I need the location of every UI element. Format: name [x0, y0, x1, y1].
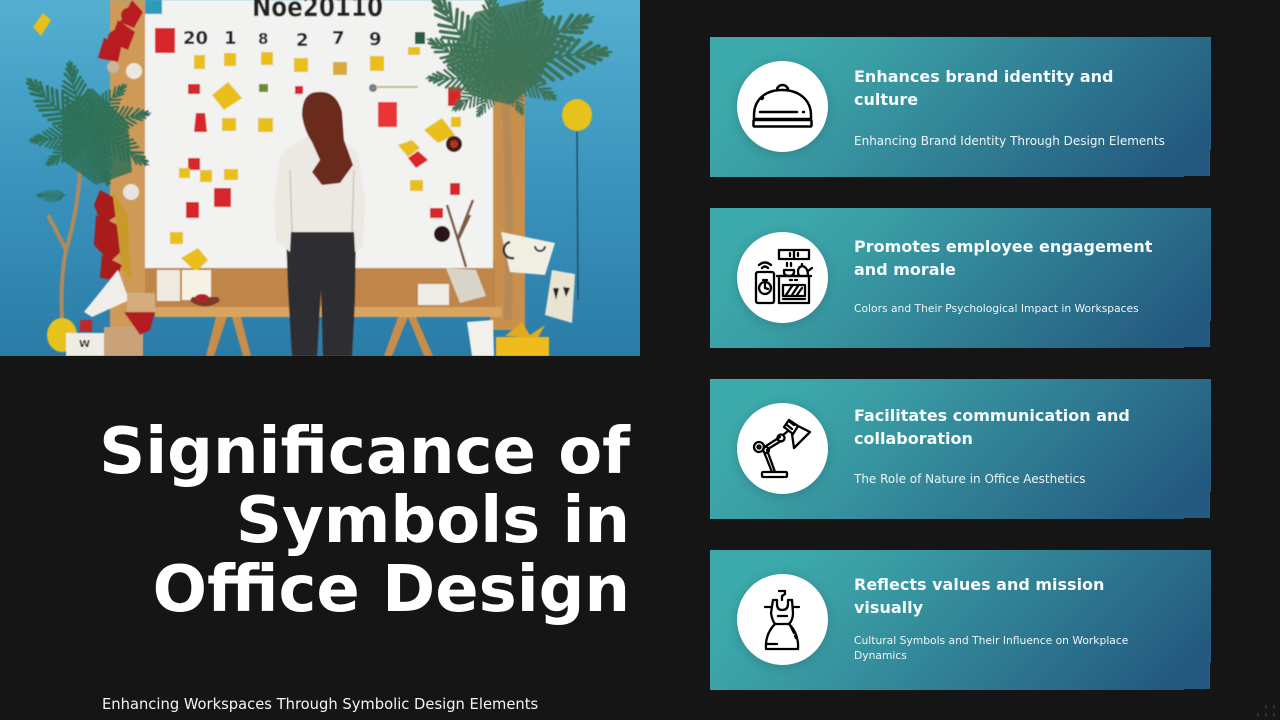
lower-left cone, bag and box [66, 270, 155, 356]
description: Cultural Symbols and Their Influence on Workplace Dynamics [854, 634, 1128, 662]
yellow balloons [47, 99, 592, 352]
red symbols [155, 28, 461, 218]
calendar heading and numbers: 8 [258, 30, 268, 48]
panel: employee engagement card [710, 208, 1211, 348]
description: Enhancing Brand Identity Through Design Elements [854, 134, 1165, 148]
calendar heading and numbers: 20 [183, 28, 208, 49]
bare branch [447, 200, 473, 267]
woman seen from behind [274, 92, 365, 356]
calendar heading and numbers: 2 [296, 30, 309, 51]
calendar heading and numbers: 9 [369, 29, 382, 50]
calendar heading and numbers [183, 0, 383, 51]
description: The Role of Nature in Office Aesthetics [854, 472, 1086, 486]
easel table and legs [155, 307, 502, 356]
panel: brand identity card [710, 37, 1211, 177]
icon: desk lamp [737, 403, 828, 494]
calendar heading and numbers: 7 [332, 28, 345, 49]
white calendar board [145, 0, 493, 268]
red garlands with baubles [94, 0, 143, 280]
left potted plant [15, 58, 156, 320]
small dark and green markers [145, 0, 462, 242]
subtitle: Enhancing Workspaces Through Symbolic Design Elements [102, 696, 538, 713]
yellow symbols [33, 13, 461, 272]
calendar heading and numbers: 1 [224, 28, 237, 49]
icon: smart kitchen [737, 232, 828, 323]
heading: Reflects values and mission visually [854, 575, 1104, 617]
icon: dress on hanger [737, 574, 828, 665]
description: Colors and Their Psychological Impact in Workspaces [854, 302, 1139, 315]
corner dots [1257, 705, 1275, 717]
panel: communication card [710, 379, 1211, 519]
icon: serving cloche [737, 61, 828, 152]
photo: woman looking at a symbol-covered calendar board [0, 0, 640, 356]
title: Significance of Symbols in Office Design [99, 415, 630, 627]
heading: Enhances brand identity and culture [854, 67, 1113, 109]
papers and gifts on the table [157, 130, 578, 356]
heading: Facilitates communication and collaboration [854, 406, 1130, 448]
wooden frame [110, 0, 525, 330]
lower-left cone, bag and box: W [79, 339, 90, 350]
right palm tree [417, 0, 614, 320]
panel: values and mission card [710, 550, 1211, 690]
heading: Promotes employee engagement and morale [854, 237, 1152, 279]
